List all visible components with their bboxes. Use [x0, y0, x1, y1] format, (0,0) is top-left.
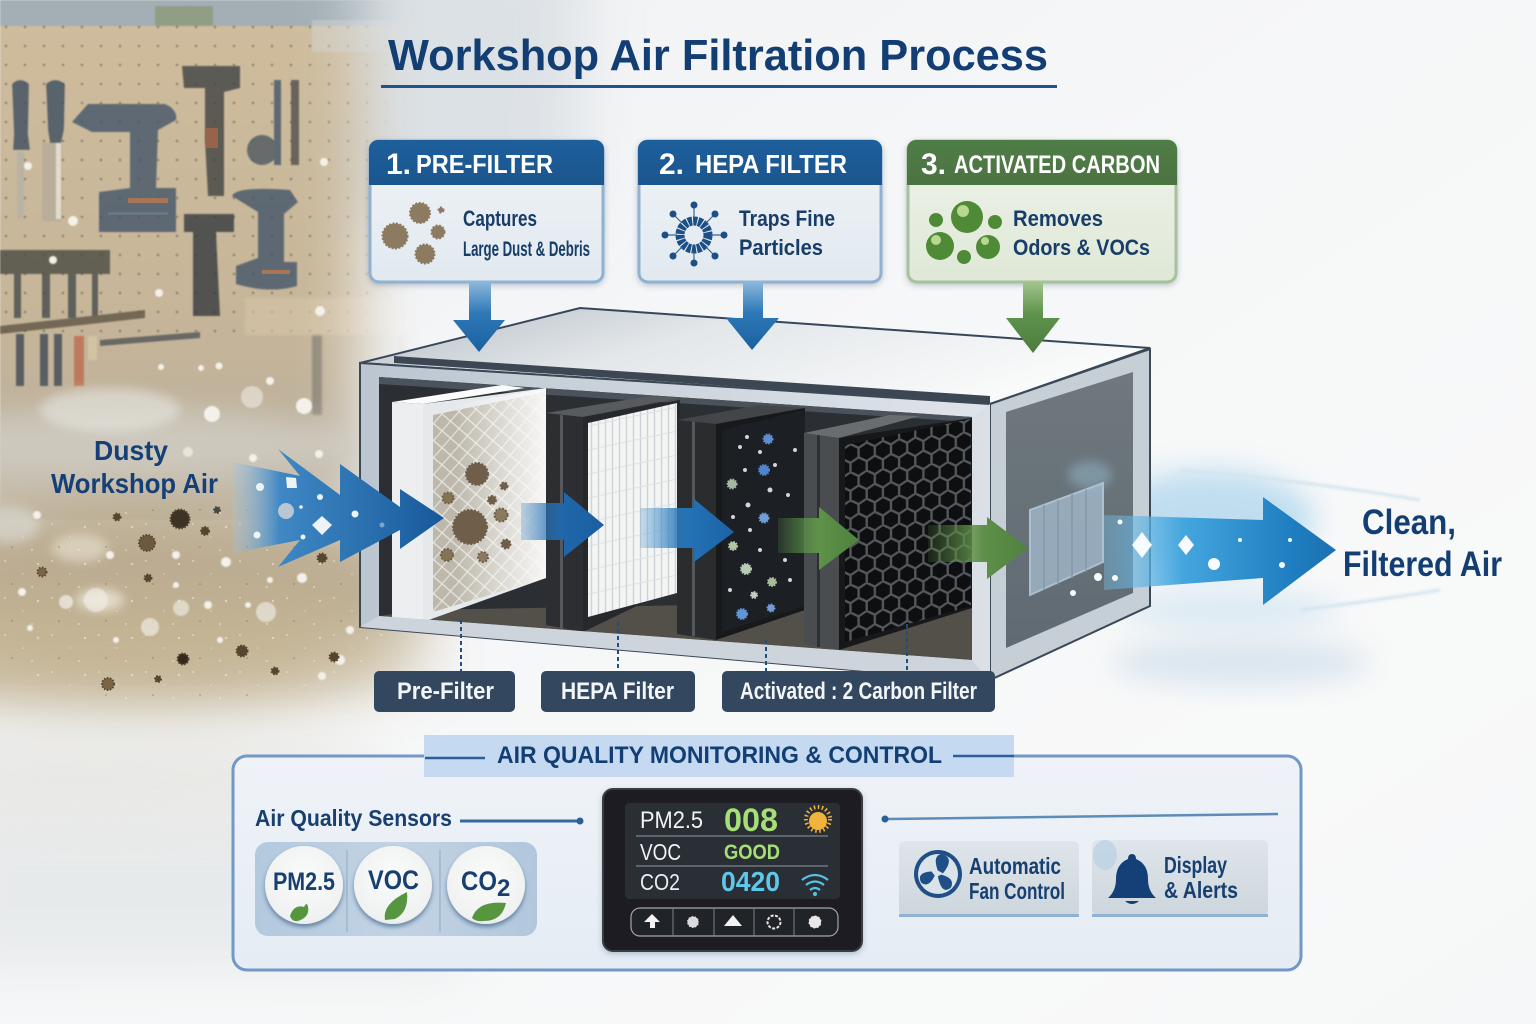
- section heading: AIR QUALITY MONITORING & CONTROL: [497, 742, 942, 769]
- sensors heading: Air Quality Sensors: [255, 805, 452, 831]
- card: hepa filter: 2.: [659, 148, 684, 181]
- tool rack: [0, 250, 110, 274]
- hammer: [184, 214, 234, 316]
- dusty workshop air label: Dusty: [94, 435, 168, 466]
- clean filtered air label: [1343, 503, 1502, 584]
- tag: hepa filter: [541, 671, 695, 712]
- air quality display: 008: [724, 802, 778, 838]
- card: hepa filter: Traps Fine: [739, 206, 835, 231]
- card: pre-filter: PRE-FILTER: [416, 149, 553, 179]
- card: activated carbon: [907, 140, 1177, 282]
- control: display and alerts: [1092, 840, 1268, 917]
- air quality display: CO2: [640, 869, 680, 895]
- tag: activated carbon filter: [722, 671, 995, 712]
- card: activated carbon: ACTIVATED CARBON: [954, 151, 1160, 179]
- icon: wifi signal: [802, 875, 828, 895]
- clamp tool: [182, 66, 240, 196]
- tag: hepa filter: HEPA Filter: [561, 678, 674, 705]
- connector line: [882, 814, 1278, 822]
- interior opening: [379, 377, 972, 660]
- dusty workshop air label: [51, 435, 218, 499]
- dusty workshop air label: Workshop Air: [51, 468, 218, 499]
- sensor: voc: VOC: [368, 865, 419, 895]
- sensor tray: [255, 842, 537, 936]
- arrow: pre-filter down: [453, 281, 505, 352]
- sensor: pm2.5: [265, 846, 343, 924]
- card: hepa filter: Particles: [739, 235, 823, 260]
- tag: pre-filter: [374, 671, 515, 712]
- white dust specks: [18, 158, 354, 680]
- drill battery details: [108, 128, 290, 274]
- drill one: [72, 104, 176, 232]
- adsorption filter panel: [677, 405, 805, 640]
- sensor: co2: CO: [461, 866, 497, 896]
- arrow: carbon down: [1006, 281, 1060, 353]
- card: activated carbon: Odors & VOCs: [1013, 235, 1150, 260]
- housing frame lower lip: [360, 616, 990, 682]
- icon: fine particles: [662, 202, 728, 266]
- icon: bell: [1108, 854, 1156, 904]
- air quality display: [603, 789, 862, 951]
- dust inside inflow: [254, 477, 384, 540]
- filter housing: [360, 308, 1150, 682]
- clean filtered air label: Clean,: [1362, 503, 1456, 542]
- sensor: co2: 2: [497, 875, 510, 902]
- control: display and alerts: & Alerts: [1164, 877, 1238, 903]
- card: pre-filter: [369, 140, 604, 282]
- housing front frame: [360, 363, 990, 682]
- housing lid: [360, 308, 1150, 404]
- drill two: [232, 189, 298, 290]
- dark dust particles: [38, 507, 338, 690]
- housing right side: [990, 349, 1150, 680]
- green flow arrow two: [928, 517, 1028, 579]
- card: activated carbon: Removes: [1013, 206, 1103, 231]
- card: pre-filter: Captures: [463, 206, 537, 231]
- flow arrow to adsorber: [640, 499, 734, 562]
- filter name tags: [374, 671, 995, 712]
- housing lid front edge: [394, 356, 990, 404]
- sensor: co2: [447, 846, 525, 924]
- card: hepa filter: [638, 140, 882, 282]
- clean air blue haze: [1105, 470, 1440, 686]
- captured fine particles: [728, 434, 776, 619]
- screwdriver tools: [12, 80, 65, 221]
- card: pre-filter: Large Dust & Debris: [463, 238, 590, 261]
- dashed leader lines: [461, 620, 907, 672]
- hepa filter panel: [546, 396, 680, 632]
- trapped dust particles: [441, 463, 510, 562]
- sparkles in exit air: [1070, 520, 1292, 596]
- side panel: [1006, 372, 1133, 648]
- card: activated carbon: 3.: [921, 148, 946, 181]
- clean filtered air label: Filtered Air: [1343, 545, 1502, 584]
- control: automatic fan: Fan Control: [969, 878, 1065, 904]
- panel: air quality monitoring and control: [233, 735, 1301, 970]
- sensor: voc: [354, 846, 432, 924]
- flow arrow to hepa: [521, 492, 604, 557]
- clean air exit arrow: [1070, 497, 1336, 605]
- tag: pre-filter: Pre-Filter: [397, 678, 494, 705]
- icon: carbon molecules: [926, 201, 1002, 264]
- control: automatic fan: Automatic: [969, 853, 1061, 879]
- sensors heading: [255, 805, 584, 831]
- control: automatic fan: [899, 841, 1079, 917]
- interior floor: [379, 600, 972, 660]
- icon: sun: [806, 807, 830, 831]
- icon: fan: [914, 850, 963, 898]
- arrow: hepa down: [726, 281, 779, 350]
- air quality display: GOOD: [724, 841, 780, 864]
- air quality display: PM2.5: [640, 807, 703, 834]
- inflow dusty air arrows: [233, 449, 444, 567]
- card: pre-filter: 1.: [386, 148, 411, 181]
- workbench: [246, 300, 368, 336]
- gear wheel: [247, 135, 277, 165]
- pre-filter panel: [392, 385, 546, 622]
- outlet vent: [1030, 461, 1112, 595]
- control buttons: [631, 908, 838, 936]
- workshop scene backdrop: [0, 0, 440, 520]
- green flow arrow one: [778, 507, 859, 570]
- icon: dust clumps: [382, 203, 444, 264]
- tag: activated carbon filter: Activated : 2 Carbon Filter: [740, 678, 977, 705]
- air quality display: 0420: [721, 866, 780, 897]
- section heading: [424, 735, 1014, 777]
- air quality display: VOC: [640, 839, 681, 865]
- sensor: pm2.5: PM2.5: [273, 868, 335, 896]
- title: Workshop Air Filtration Process: [388, 31, 1048, 80]
- dusty floor haze: [0, 388, 430, 820]
- card: hepa filter: HEPA FILTER: [695, 149, 847, 179]
- carbon filter panel: [804, 415, 972, 650]
- control: display and alerts: Display: [1164, 852, 1227, 878]
